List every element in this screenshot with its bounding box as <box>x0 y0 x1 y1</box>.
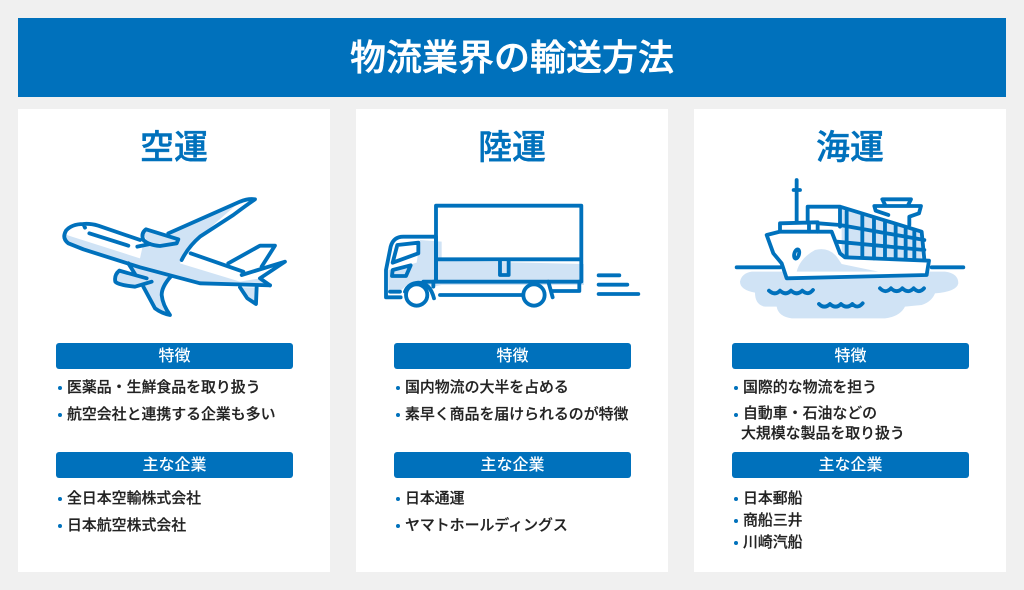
heading: land: 陸運 <box>478 129 546 167</box>
title: 物流業界の輸送方法 <box>350 37 674 78</box>
companies bar <box>394 452 631 478</box>
company item: ヤマトホールディングス <box>405 518 568 534</box>
feature item: 医薬品・生鮮食品を取り扱う <box>67 380 261 396</box>
feature item: 大規模な製品を取り扱う <box>741 426 905 442</box>
panel: sea <box>694 109 1006 572</box>
heading: sea: 海運 <box>816 129 884 167</box>
feature item: 自動車・石油などの <box>743 406 877 422</box>
feature item: 国内物流の大半を占める <box>405 380 569 396</box>
feature item: 航空会社と連携する企業も多い <box>67 407 275 423</box>
company item: 川崎汽船 <box>743 535 803 551</box>
companies bar: 主な企業 <box>818 457 882 474</box>
features bar: 特徴 <box>158 348 190 365</box>
company item: 日本通運 <box>405 491 465 507</box>
features bar: 特徴 <box>496 348 528 365</box>
features bar <box>732 343 969 369</box>
company item: 日本郵船 <box>743 491 803 507</box>
company item: 全日本空輸株式会社 <box>67 491 201 507</box>
features bar: 特徴 <box>834 348 866 365</box>
feature item <box>732 404 905 444</box>
company item: 日本航空株式会社 <box>67 518 186 534</box>
companies bar: 主な企業 <box>480 457 544 474</box>
features bar <box>394 343 631 369</box>
title <box>18 18 1006 97</box>
companies bar <box>56 452 293 478</box>
companies bar <box>732 452 969 478</box>
panel: land <box>356 109 668 572</box>
features bar <box>56 343 293 369</box>
companies bar: 主な企業 <box>142 457 206 474</box>
feature item: 素早く商品を届けられるのが特徴 <box>405 407 628 423</box>
panel: air <box>18 109 330 572</box>
icon: truck <box>386 206 638 306</box>
heading: air: 空運 <box>140 129 208 167</box>
icon: airplane <box>64 199 285 315</box>
company item: 商船三井 <box>743 513 803 529</box>
feature item: 国際的な物流を担う <box>743 380 877 396</box>
icon: container ship <box>737 180 963 318</box>
